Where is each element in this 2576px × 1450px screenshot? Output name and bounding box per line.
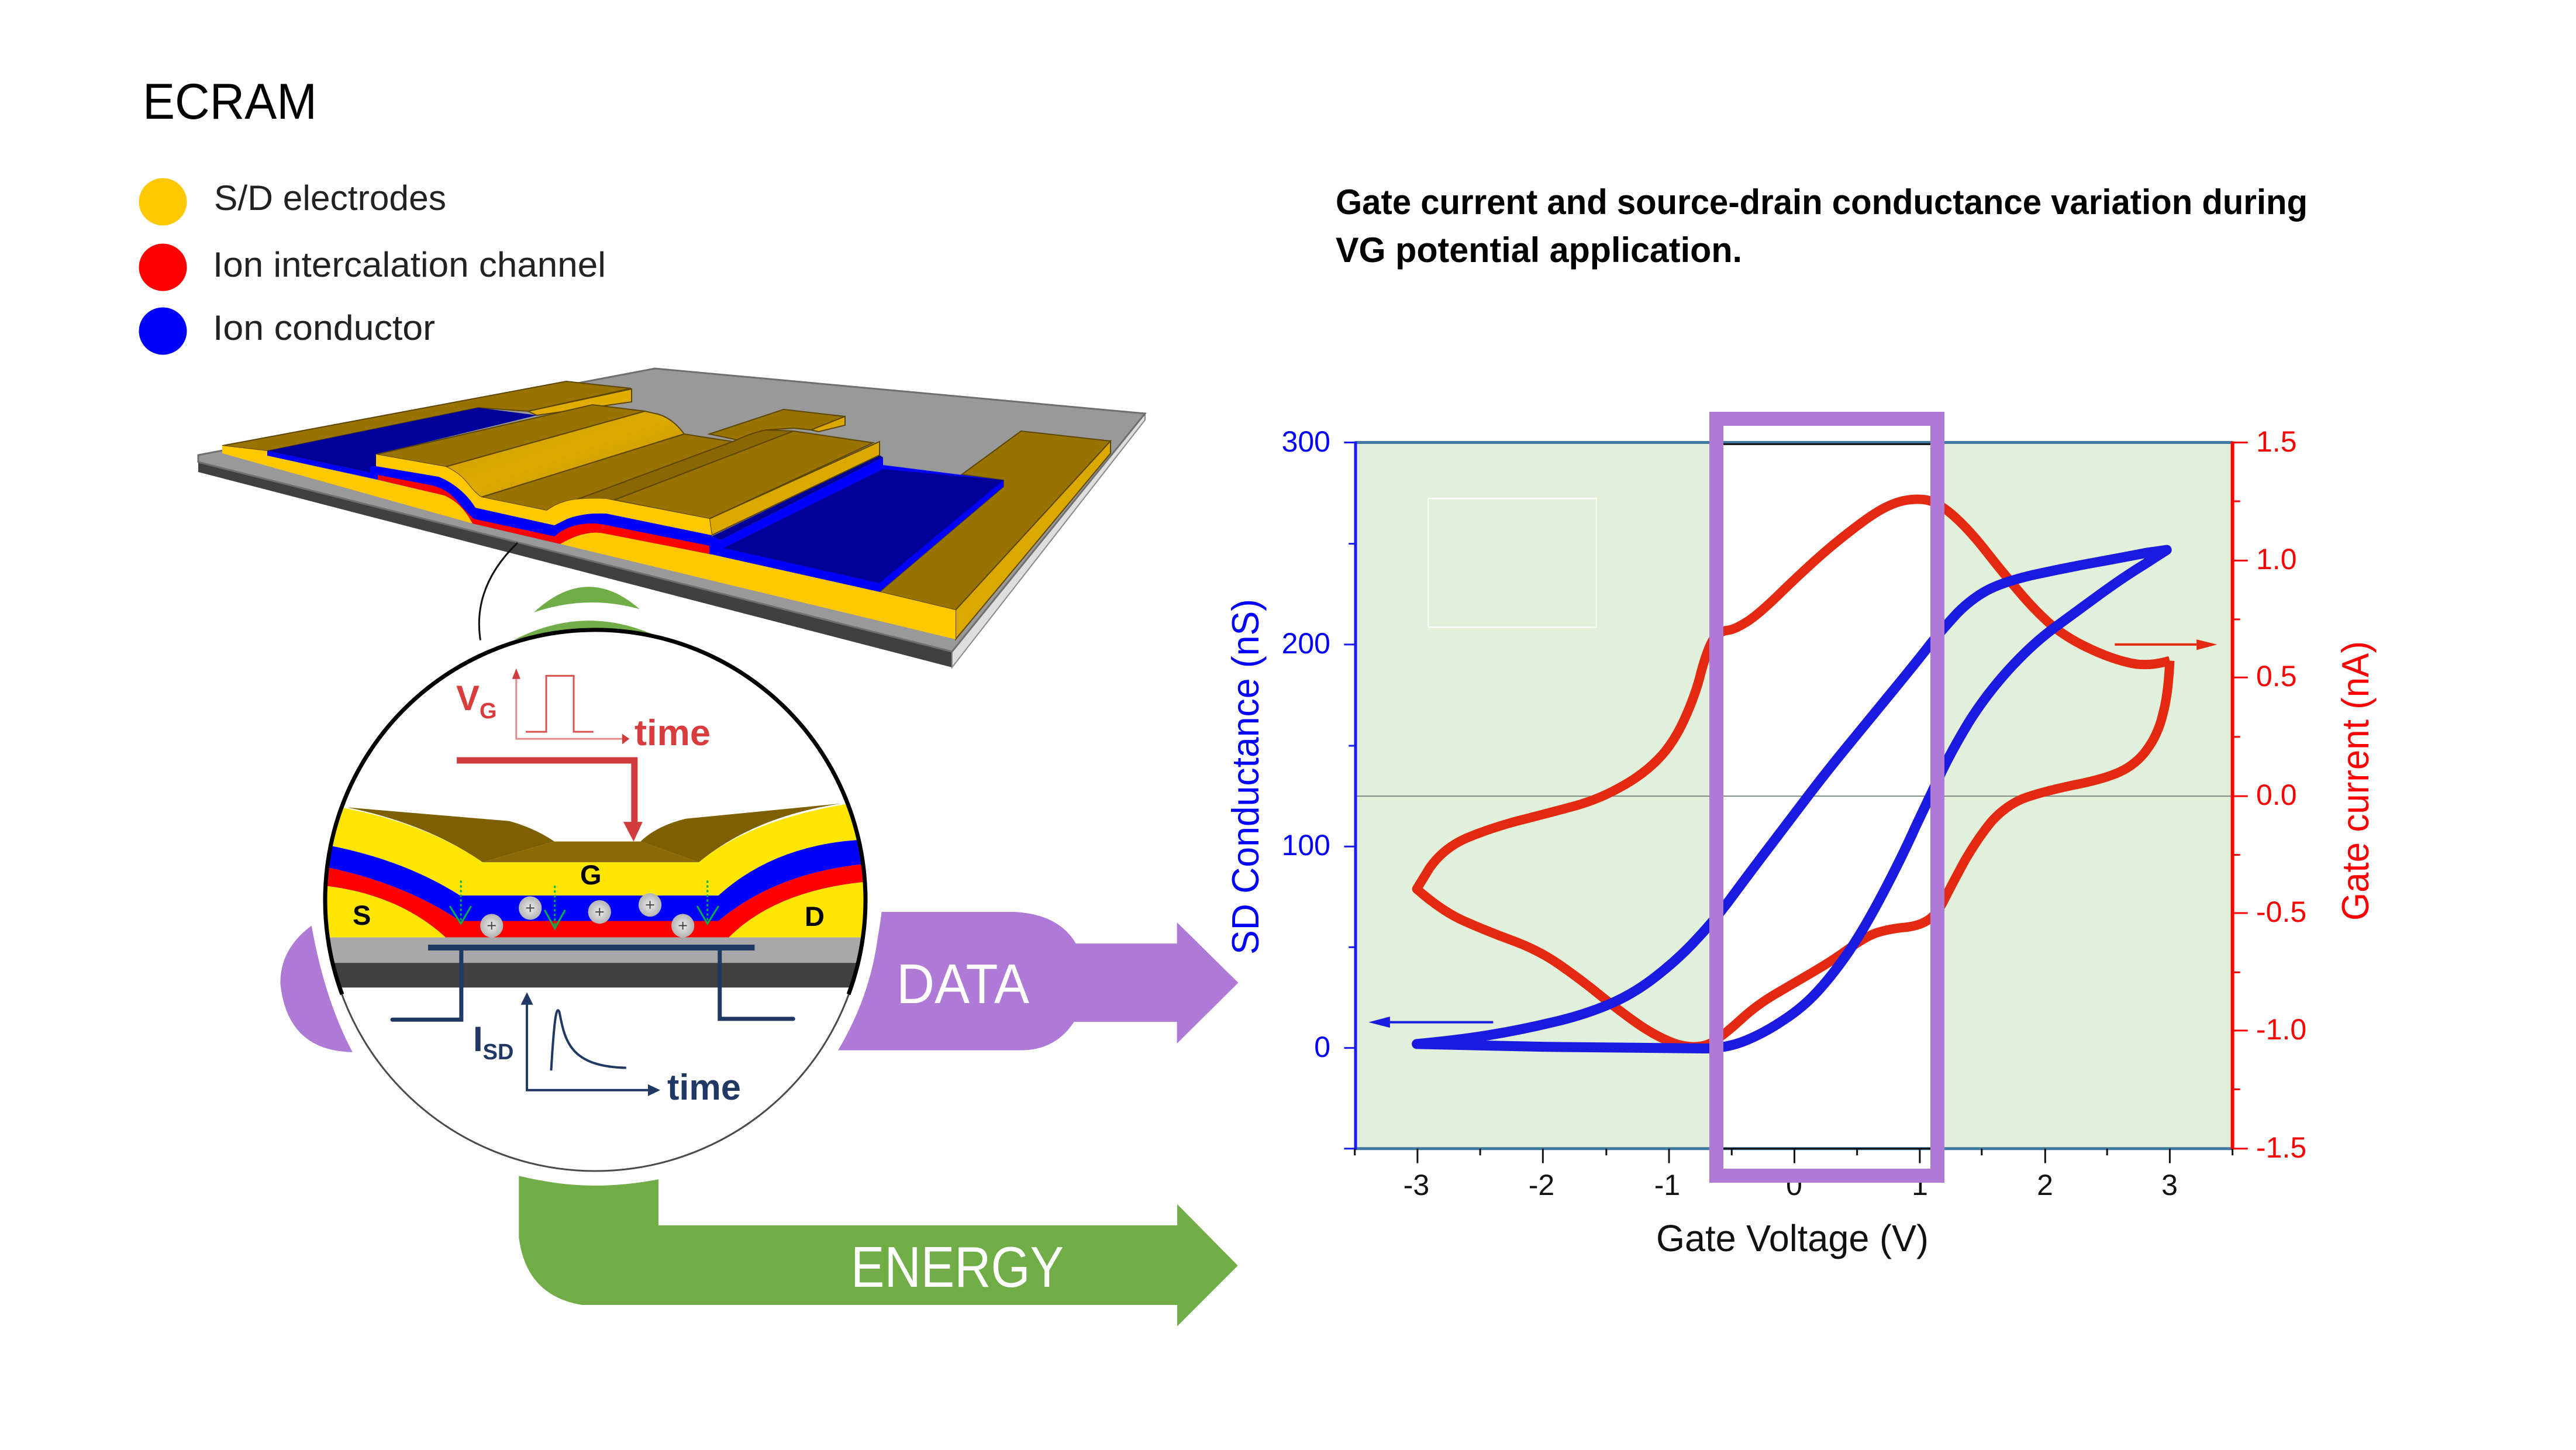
x axis tick labels: -1 [1654, 1169, 1680, 1201]
chart heading: Gate current and source-drain conductance variation during [1336, 182, 2308, 222]
legend [139, 178, 606, 354]
callout line from device to lens [479, 543, 518, 650]
right axis tick labels [2256, 425, 2306, 1164]
rear gate contact [709, 409, 845, 440]
ion conductor planes [267, 408, 1003, 592]
white halo around lens [311, 616, 880, 1186]
lens: cross-section magnifier [280, 587, 880, 1186]
gate voltage pulse and arrow [457, 669, 643, 842]
arrow: conductance axis pointer [1368, 1017, 1493, 1028]
legend item: S/D electrodes [139, 178, 446, 226]
right axis tick labels: -1.0 [2256, 1013, 2306, 1046]
lens outline [325, 630, 865, 1171]
left axis tick labels: 300 [1282, 425, 1330, 458]
right axis tick labels: 1.0 [2256, 543, 2297, 576]
chart heading [1336, 182, 2308, 270]
gate front face [376, 454, 712, 535]
x axis tick labels: 2 [2037, 1169, 2053, 1201]
label: navy time: time [667, 1067, 741, 1108]
bottom D electrode [560, 532, 956, 639]
substrate [198, 459, 952, 667]
purple arc piece left of lens [280, 926, 353, 1052]
label: S: S [353, 900, 371, 931]
legend item: Ion conductor: Ion conductor [213, 308, 435, 347]
plot area and axes [1344, 442, 2248, 1163]
left electrode [222, 381, 632, 451]
label: VG: V [456, 678, 480, 718]
curve: gate current [1417, 500, 2170, 1047]
ions and diffusion arrows [450, 881, 719, 938]
source-drain circuit and current trace [392, 948, 793, 1096]
x axis tick labels: -2 [1529, 1169, 1554, 1201]
right axis tick labels: -0.5 [2256, 896, 2306, 928]
legend item: Ion intercalation channel [139, 243, 606, 291]
right axis tick labels: 0.5 [2256, 660, 2297, 693]
left axis tick labels [1282, 425, 1330, 1063]
right axis tick labels: 1.5 [2256, 425, 2297, 458]
chart: gate current and SD conductance vs gate voltage [1224, 419, 2377, 1259]
x axis tick labels: 1 [1912, 1169, 1928, 1201]
intercalation channel front layer [378, 475, 709, 554]
arrow: DATA [838, 912, 1238, 1051]
right axis tick labels: 0.0 [2256, 779, 2297, 811]
right axis tick labels: -1.5 [2256, 1131, 2306, 1164]
cross-section layers [325, 801, 866, 987]
right electrode [880, 431, 1111, 639]
label: red time: time [634, 713, 711, 753]
x axis title: Gate Voltage (V) [1656, 1217, 1929, 1259]
arrow: ENERGY: ENERGY [851, 1235, 1064, 1299]
highlight window [1716, 419, 1937, 1176]
label: G: G [580, 859, 602, 890]
x axis tick labels: -3 [1403, 1169, 1429, 1201]
arrow: DATA: DATA [896, 953, 1029, 1015]
x axis tick labels [1403, 1169, 2178, 1201]
label: ISD: I [473, 1020, 483, 1059]
arrow: gate current axis pointer [2115, 639, 2217, 650]
left axis title: SD Conductance (nS) [1224, 599, 1267, 955]
x axis tick labels: 3 [2161, 1169, 2178, 1201]
right axis title: Gate current (nA) [2334, 641, 2377, 921]
chart heading: VG potential application. [1336, 230, 1742, 270]
ion conductor front layer [370, 466, 712, 554]
left axis tick labels: 0 [1314, 1031, 1330, 1063]
legend item: S/D electrodes: S/D electrodes [214, 178, 446, 218]
arrow: ENERGY [519, 1176, 1238, 1326]
x axis tick labels: 0 [1786, 1169, 1802, 1201]
green arc pieces above lens [514, 587, 660, 640]
device: 3D ECRAM stack [198, 368, 1145, 667]
legend item: Ion intercalation channel: Ion intercalation channel [213, 245, 606, 284]
left axis tick labels: 200 [1282, 627, 1330, 660]
label: ISD: SD [483, 1040, 513, 1065]
legend item: Ion conductor [139, 308, 435, 354]
bottom S electrode [222, 446, 473, 523]
label: D: D [805, 901, 825, 932]
label: VG: G [480, 699, 497, 724]
left axis tick labels: 100 [1282, 829, 1330, 862]
gate electrode top facets [376, 405, 880, 535]
title: ECRAM: ECRAM [143, 74, 317, 130]
curve: SD conductance [1417, 550, 2167, 1049]
